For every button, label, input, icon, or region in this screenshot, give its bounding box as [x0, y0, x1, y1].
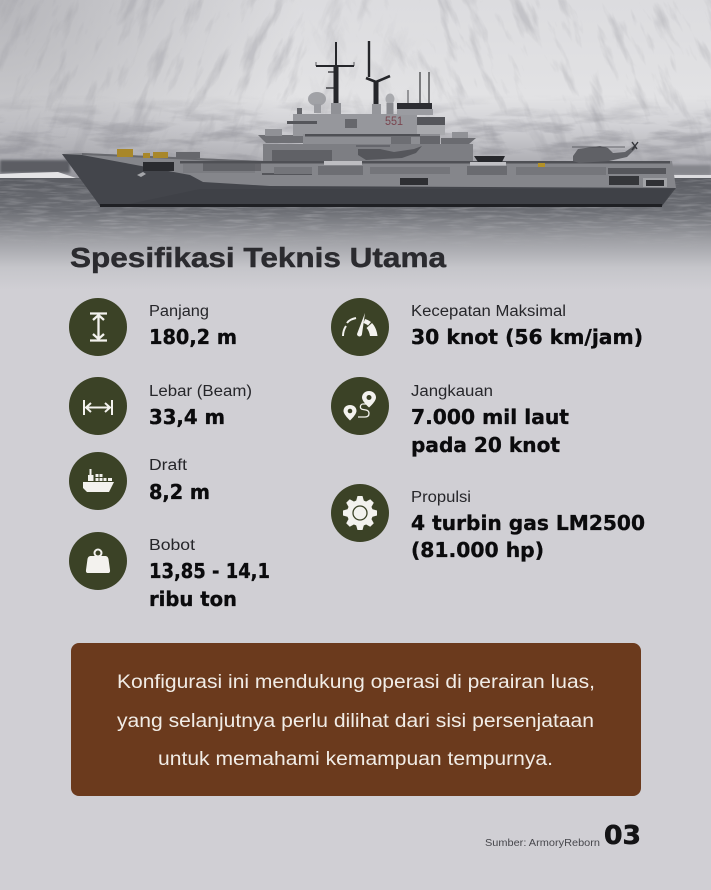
spec: Jangkauan: Jangkauan: [411, 383, 493, 400]
spec: Bobot: [69, 532, 270, 611]
spec: Lebar: 33,4 m: [149, 405, 225, 429]
icon: weight: [69, 532, 127, 590]
icon: horizontal width arrow: [69, 377, 127, 435]
icon: vertical length arrow: [69, 298, 127, 356]
spec: Propulsi: 4 turbin gas LM2500: [411, 511, 645, 535]
spec: Kecepatan Maksimal: [331, 298, 643, 356]
spec: Panjang: 180,2 m: [149, 325, 237, 349]
hull number: 551: [385, 116, 403, 128]
sea: [0, 178, 711, 274]
spec: Bobot: Bobot: [149, 537, 196, 554]
source note: Sumber: ArmoryReborn: [485, 837, 600, 849]
spec: Propulsi: Propulsi: [411, 489, 471, 506]
spec: Jangkauan: 7.000 mil laut: [411, 405, 569, 429]
spec: Lebar: [69, 377, 252, 435]
spec: Bobot: 13,85 - 14,1: [149, 559, 270, 583]
icon: route with pins: [331, 377, 389, 435]
spec: Propulsi: (81.000 hp): [411, 538, 544, 562]
spec: Lebar: Lebar (Beam): [149, 383, 252, 400]
callout: untuk memahami kemampuan tempurnya.: [158, 749, 553, 770]
title: Spesifikasi Teknis Utama: [70, 242, 446, 273]
spec: Kecepatan Maksimal: 30 knot (56 km/jam): [411, 325, 643, 349]
mountain backdrop: [0, 0, 711, 178]
hull: [62, 153, 676, 207]
spec: Panjang: Panjang: [149, 303, 209, 320]
helicopter on stern deck: [572, 142, 638, 163]
gallery details: [262, 173, 312, 175]
icon: speedometer: [331, 298, 389, 356]
callout: yang selanjutnya perlu dilihat dari sisi persenjataan: [117, 711, 594, 732]
masts and antennas: [316, 41, 429, 106]
shoreline: [0, 160, 711, 179]
spec: Kecepatan Maksimal: Kecepatan Maksimal: [411, 303, 566, 320]
spec: Draft: [69, 452, 210, 510]
deck equipment: [117, 149, 545, 167]
spec: Bobot: ribu ton: [149, 587, 237, 611]
aircraft carrier: [62, 41, 676, 207]
spec: Propulsi: [331, 484, 645, 562]
icon: cargo ship: [69, 452, 127, 510]
radomes: [297, 92, 394, 115]
helicopter on island: [356, 146, 422, 160]
spec: Jangkauan: [331, 377, 569, 457]
callout: Konfigurasi ini mendukung operasi di perairan luas,: [117, 672, 595, 693]
island superstructure: [258, 103, 476, 162]
icon: turbine gear: [331, 484, 389, 542]
spec: Panjang: [69, 298, 237, 356]
spec: Draft: Draft: [149, 457, 188, 474]
spec: Draft: 8,2 m: [149, 480, 210, 504]
page number: 03: [604, 821, 641, 851]
callout: [71, 643, 641, 796]
spec: Jangkauan: pada 20 knot: [411, 433, 560, 457]
photo: snowy mountain, sea and aircraft carrier: [0, 0, 711, 274]
